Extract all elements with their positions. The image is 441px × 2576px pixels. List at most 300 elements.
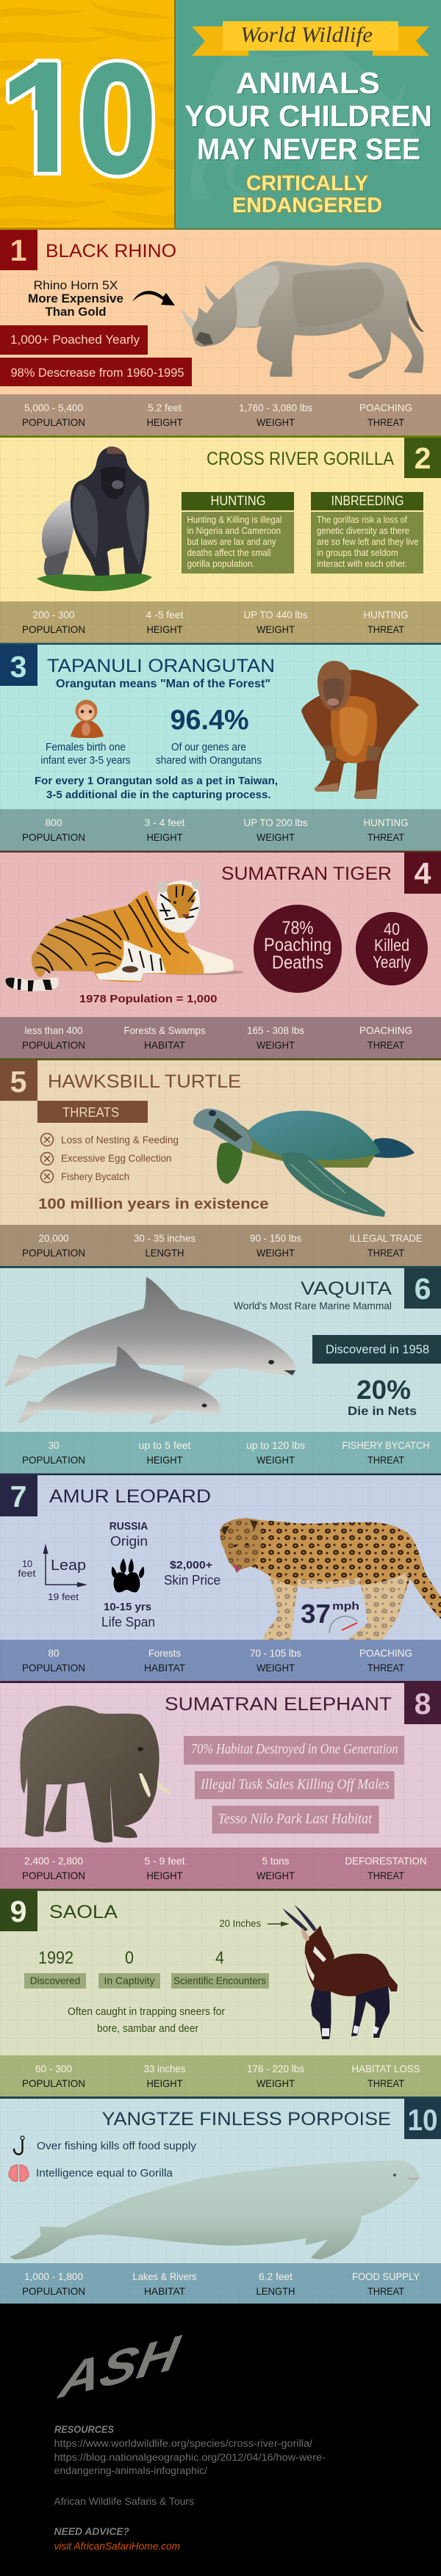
icon: fish hook xyxy=(14,2136,24,2154)
stat: threat: THREAT xyxy=(368,623,404,635)
life span: Life Span xyxy=(101,1615,155,1629)
stat: threat: THREAT xyxy=(368,1039,404,1051)
text: genes: Of our genes are xyxy=(171,741,246,753)
resources: endangering-animals-infographic/ xyxy=(54,2465,207,2476)
text: birth rate: infant ever 3-5 years xyxy=(41,754,131,767)
stat: height xyxy=(144,2063,185,2089)
big number 10: 0 xyxy=(79,31,157,206)
stat: height xyxy=(138,1439,191,1466)
title: CROSS RIVER GORILLA xyxy=(207,449,394,469)
stat: height: HEIGHT xyxy=(147,1454,183,1466)
stat: population: POPULATION xyxy=(22,1662,85,1674)
panel: hunting: Hunting & Killing is illegal xyxy=(187,515,282,525)
stat: habitat: HABITAT xyxy=(144,2285,185,2297)
stat: length: LENGTH xyxy=(256,2285,295,2297)
number badge 8: 8 xyxy=(415,1687,431,1721)
stat: height xyxy=(146,609,184,635)
number badge 1 xyxy=(0,230,37,270)
stat: threat xyxy=(352,2271,420,2297)
stat: threat: THREAT xyxy=(368,2077,404,2089)
stat: threat: POACHING xyxy=(359,1024,412,1036)
number badge 3: 3 xyxy=(10,650,26,684)
number badge 4 xyxy=(404,853,441,894)
stat: weight: UP TO 200 lbs xyxy=(244,817,307,828)
stat: weight: 1,760 - 3,080 lbs xyxy=(239,402,312,413)
callout circle: killed yearly: 40 xyxy=(384,919,400,938)
vaquita illustration: adult xyxy=(5,1277,295,1388)
need advice xyxy=(54,2525,180,2552)
fact panel: tusk sales xyxy=(195,1771,394,1799)
stat: weight: UP TO 440 lbs xyxy=(244,609,307,621)
big number 10: 1 xyxy=(0,32,87,206)
stat: height: 5.2 feet xyxy=(148,402,182,413)
title: HAWKSBILL TURTLE xyxy=(48,1071,241,1092)
callout circle: killed yearly: Killed xyxy=(374,936,409,955)
callout circle: killed yearly: Yearly xyxy=(373,952,411,972)
stat: weight: WEIGHT xyxy=(257,1662,295,1674)
threat item: bycatch xyxy=(41,1171,129,1182)
stat banner: decrease xyxy=(0,358,192,386)
horn annotation: 20 Inches xyxy=(219,1917,261,1929)
stat: length: 6.2 feet xyxy=(259,2271,293,2282)
fact: in captivity: In Captivity xyxy=(104,1975,154,1986)
text: birth rate: Females birth one xyxy=(46,741,126,753)
number badge 7 xyxy=(0,1475,37,1516)
stat: height: up to 5 feet xyxy=(138,1439,191,1451)
stat: length: LENGTH xyxy=(146,1247,184,1259)
headline: MAY NEVER SEE xyxy=(197,132,420,166)
stat: population: POPULATION xyxy=(22,2285,85,2297)
section 9: saola xyxy=(0,1891,441,2099)
fact panel: tesso nilo: Tesso Nilo Park Last Habitat xyxy=(218,1811,372,1827)
header teal panel xyxy=(176,0,441,228)
section 10: yangtze finless porpoise xyxy=(0,2099,441,2304)
title: SAOLA xyxy=(49,1902,118,1922)
stat: threat: DEFORESTATION xyxy=(345,1855,426,1867)
section 3: tapanuli orangutan xyxy=(0,645,441,853)
callout: rhino horn: Rhino Horn 5X xyxy=(34,278,118,292)
callout: rhino horn xyxy=(28,278,123,319)
fact: in captivity xyxy=(98,1948,160,1989)
callout: discovered xyxy=(312,1335,441,1364)
callout circle: killed yearly xyxy=(356,912,428,985)
fact panel: tesso nilo xyxy=(212,1806,379,1834)
fact: scientific encounters: Scientific Encounters xyxy=(173,1975,266,1986)
stat: threat: THREAT xyxy=(368,1247,404,1259)
note: trapping: Often caught in trapping sneers for xyxy=(68,2006,225,2018)
stat: threat xyxy=(350,1232,422,1259)
stat: threat xyxy=(359,402,412,428)
stat: population: 30 xyxy=(49,1439,60,1451)
callout: rhino horn: Than Gold xyxy=(46,305,106,319)
stat: population: 80 xyxy=(49,1647,60,1659)
subtitle: World's Most Rare Marine Mammal xyxy=(234,1300,392,1311)
stat: 96.4%: 96.4% xyxy=(171,705,248,736)
rhino illustration xyxy=(181,261,424,379)
section 8: sumatran elephant xyxy=(0,1683,441,1891)
stat: height: HEIGHT xyxy=(147,623,183,635)
text: genes: shared with Orangutans xyxy=(156,754,262,767)
panel: hunting: in Nigeria and Cameroon xyxy=(187,526,281,536)
subhead: critically endangered: CRITICALLY xyxy=(246,172,368,195)
title: AMUR LEOPARD xyxy=(49,1486,211,1507)
header yellow panel xyxy=(0,0,175,228)
stat: 20% die in nets: Die in Nets xyxy=(348,1404,417,1418)
stat: threat: HUNTING xyxy=(363,817,409,828)
section 2: cross river gorilla xyxy=(0,438,441,645)
stat: habitat xyxy=(144,1647,185,1674)
text: birth rate xyxy=(41,741,131,767)
threat item: nesting: Loss of Nesting & Feeding xyxy=(61,1134,179,1146)
header xyxy=(0,0,441,230)
callout circle: poaching deaths: Poaching xyxy=(264,935,331,955)
headline: ANIMALS xyxy=(236,66,380,100)
fact: scientific encounters xyxy=(171,1948,269,1989)
title: YANGTZE FINLESS PORPOISE xyxy=(101,2109,391,2130)
life span: 10-15 yrs xyxy=(104,1601,151,1613)
title: VAQUITA xyxy=(301,1278,392,1299)
panel: inbreeding: INBREEDING xyxy=(331,493,404,508)
stat: habitat: Forests & Swamps xyxy=(123,1024,206,1036)
stat: population: POPULATION xyxy=(22,2077,85,2089)
stat: weight xyxy=(250,1232,301,1259)
stat: threat: HABITAT LOSS xyxy=(351,2063,420,2074)
section 7: amur leopard xyxy=(0,1475,441,1683)
stat: height: 5 - 9 feet xyxy=(144,1855,185,1867)
origin: RUSSIA xyxy=(110,1520,148,1533)
stat: weight: WEIGHT xyxy=(257,1870,295,1881)
stat: threat xyxy=(351,2063,420,2089)
stat: population xyxy=(22,1855,85,1881)
fact panel: habitat destroyed: 70% Habitat Destroyed in One Generation xyxy=(191,1741,398,1757)
stat: threat: THREAT xyxy=(368,831,404,843)
stat: weight: up to 120 lbs xyxy=(246,1439,305,1451)
stat: height: HEIGHT xyxy=(147,2077,183,2089)
number badge 9 xyxy=(0,1891,37,1931)
stat bar xyxy=(22,1855,426,1881)
stat: height: HEIGHT xyxy=(147,831,183,843)
stat: length: 30 - 35 inches xyxy=(134,1232,196,1244)
stat: threat: THREAT xyxy=(368,1454,404,1466)
subtitle: Orangutan means "Man of the Forest" xyxy=(56,678,270,690)
resources: https://www.worldwildlife.org/species/cross-river-gorilla/ xyxy=(54,2438,312,2449)
stat: population: POPULATION xyxy=(22,416,85,428)
leap diagram xyxy=(18,1544,87,1602)
need advice: visit AfricanSafariHome.com xyxy=(54,2540,180,2552)
icon: baby orangutan xyxy=(71,700,104,738)
big number 10: 0 xyxy=(79,31,157,206)
logo: ASH: ASH xyxy=(54,2324,185,2409)
stat: population xyxy=(22,402,85,428)
number badge 6: 6 xyxy=(415,1272,431,1306)
stat: habitat xyxy=(123,1024,206,1051)
ribbon: World Wildlife xyxy=(192,21,429,56)
stat: weight xyxy=(247,1024,304,1051)
stat: weight: 176 - 220 lbs xyxy=(247,2063,304,2074)
stat: weight: 165 - 308 lbs xyxy=(247,1024,304,1036)
stat: weight: WEIGHT xyxy=(257,831,295,843)
stat: weight: WEIGHT xyxy=(257,416,295,428)
vaquita illustration: calf xyxy=(18,1346,220,1425)
stat bar xyxy=(22,1439,429,1466)
callout: rhino horn: More Expensive xyxy=(28,292,123,305)
fact: intelligence: Intelligence equal to Gorilla xyxy=(36,2167,173,2179)
stat: 20% die in nets: 20% xyxy=(356,1375,411,1405)
stat: weight: WEIGHT xyxy=(257,623,295,635)
porpoise illustration xyxy=(10,2160,420,2260)
stat: population: POPULATION xyxy=(22,1247,85,1259)
stat: height: HEIGHT xyxy=(147,1870,183,1881)
note: trapping: bore, sambar and deer xyxy=(97,2023,198,2035)
stat: population: 800 xyxy=(46,817,62,828)
stat: weight xyxy=(244,817,307,843)
stat bar xyxy=(22,1647,412,1674)
title: SUMATRAN ELEPHANT xyxy=(165,1694,392,1715)
stat: height: HEIGHT xyxy=(147,416,183,428)
section 6: vaquita xyxy=(0,1268,441,1475)
panel: inbreeding: genetic diversity as there xyxy=(317,526,409,536)
headline: YOUR CHILDREN xyxy=(184,99,432,133)
stat bar xyxy=(22,1232,422,1259)
fact: in captivity: 0 xyxy=(125,1948,134,1968)
panel: inbreeding: The gorillas risk a loss of xyxy=(317,515,407,525)
stat: height: 3 - 4 feet xyxy=(144,817,185,828)
number badge 6 xyxy=(404,1268,441,1309)
fact panel: tusk sales: Illegal Tusk Sales Killing Off Males xyxy=(200,1776,390,1792)
panel: hunting: HUNTING xyxy=(210,493,266,508)
title: BLACK RHINO xyxy=(46,241,176,261)
stat: population: POPULATION xyxy=(22,1870,85,1881)
ghost rhino watermark xyxy=(191,51,429,208)
stat: height xyxy=(147,402,183,428)
stat: threat xyxy=(345,1855,426,1881)
stat bar xyxy=(22,402,412,428)
stat: population: 60 - 300 xyxy=(35,2063,72,2074)
number badge 4: 4 xyxy=(415,856,431,890)
stat: population: POPULATION xyxy=(22,1039,85,1051)
stat: threat: THREAT xyxy=(368,2285,404,2297)
stat: weight xyxy=(246,1439,305,1466)
stat: weight: WEIGHT xyxy=(257,2077,295,2089)
stat: threat: FISHERY BYCATCH xyxy=(343,1439,429,1451)
number badge 7: 7 xyxy=(10,1480,26,1513)
life span xyxy=(101,1601,155,1629)
title: TAPANULI ORANGUTAN xyxy=(47,656,275,676)
stat bar xyxy=(22,2063,420,2089)
stat: habitat xyxy=(132,2271,197,2297)
number badge 1: 1 xyxy=(10,234,26,267)
number badge 9: 9 xyxy=(10,1895,26,1928)
turtle illustration xyxy=(193,1109,415,1217)
stat: population xyxy=(22,1647,85,1674)
stat: population: 1,000 - 1,800 xyxy=(24,2271,83,2282)
stat: height: 33 inches xyxy=(144,2063,185,2074)
stat: height xyxy=(144,1855,185,1881)
leap diagram: 19 feet xyxy=(48,1591,79,1602)
elephant illustration xyxy=(20,1706,172,1842)
icon: paw xyxy=(112,1558,144,1592)
number badge 8 xyxy=(404,1683,441,1724)
stat: threat xyxy=(363,817,409,843)
stat banner: poached xyxy=(0,325,148,355)
number badge 5 xyxy=(0,1060,37,1101)
threat item: eggs: Excessive Egg Collection xyxy=(61,1152,172,1164)
panel: inbreeding: are so few left and they live xyxy=(317,537,419,547)
callout: discovered: Discovered in 1958 xyxy=(326,1342,429,1356)
stat: threat: ILLEGAL TRADE xyxy=(350,1232,422,1244)
orangutan illustration xyxy=(301,661,419,799)
stat bar xyxy=(22,2271,420,2297)
stat: threat: POACHING xyxy=(359,402,412,413)
stat: weight: WEIGHT xyxy=(257,1039,295,1051)
stat: population: 2,400 - 2,800 xyxy=(24,1855,83,1867)
stat: population: POPULATION xyxy=(22,1454,85,1466)
stat: habitat: Forests xyxy=(148,1647,181,1659)
stat: weight: 70 - 105 lbs xyxy=(250,1647,301,1659)
number badge 5: 5 xyxy=(10,1065,26,1099)
number badge 2: 2 xyxy=(415,441,431,475)
leap diagram: feet xyxy=(18,1568,36,1579)
stat: weight: 90 - 150 lbs xyxy=(250,1232,301,1244)
stat bar xyxy=(22,1024,412,1051)
stat: weight: WEIGHT xyxy=(257,1454,295,1466)
fact panel: habitat destroyed xyxy=(184,1736,404,1765)
leopard illustration xyxy=(220,1519,441,1640)
callout circle: poaching deaths: 78% xyxy=(282,918,313,938)
credit: African Wildlife Safaris & Tours xyxy=(54,2495,194,2507)
speed callout: 37 mph: mph xyxy=(332,1600,359,1613)
stat: population xyxy=(22,1232,85,1259)
note: 1978 population: 1978 Population = 1,000 xyxy=(79,993,217,1005)
stat: population xyxy=(22,609,85,635)
text: genes xyxy=(156,741,262,767)
horn annotation xyxy=(219,1917,290,1929)
panel: hunting: gorilla population. xyxy=(187,559,254,569)
stat: population: POPULATION xyxy=(22,831,85,843)
stat: habitat: HABITAT xyxy=(144,1039,185,1051)
panel: inbreeding xyxy=(311,492,423,574)
stat: weight xyxy=(257,1855,295,1881)
fact: scientific encounters: 4 xyxy=(215,1948,224,1968)
stat: weight xyxy=(244,609,307,635)
stat: weight: 5 tons xyxy=(262,1855,290,1867)
headline xyxy=(184,66,432,166)
stat: weight: WEIGHT xyxy=(257,1247,295,1259)
stat: population: 200 - 300 xyxy=(32,609,75,621)
leap diagram: 10 xyxy=(22,1558,32,1569)
stat: weight xyxy=(247,2063,304,2089)
panel: inbreeding: interact with each other. xyxy=(317,559,407,569)
stat: population: 5,000 - 5,400 xyxy=(24,402,83,413)
stat: habitat: HABITAT xyxy=(144,1662,185,1674)
callout circle: poaching deaths xyxy=(254,905,342,993)
stat: population xyxy=(22,1439,85,1466)
threats heading xyxy=(37,1101,148,1123)
fact: over fishing: Over fishing kills off food supply xyxy=(37,2140,197,2152)
threats heading: THREATS xyxy=(62,1105,119,1120)
subhead: critically endangered xyxy=(232,172,382,217)
number badge 3 xyxy=(0,645,37,686)
stat bar xyxy=(22,817,409,843)
origin xyxy=(110,1520,148,1549)
stat: 20% die in nets xyxy=(348,1375,417,1418)
number badge 10: 10 xyxy=(407,2103,438,2137)
stat banner: poached: 1,000+ Poached Yearly xyxy=(10,333,140,347)
arrow xyxy=(132,291,175,305)
threat item: bycatch: Fishery Bycatch xyxy=(61,1171,129,1182)
skin price: Skin Price xyxy=(164,1573,220,1588)
gorilla illustration xyxy=(37,446,152,591)
big number 10: 1 xyxy=(0,32,87,206)
panel: inbreeding: in groups that seldom xyxy=(317,548,398,558)
note: trapping xyxy=(68,2006,225,2035)
stat: population xyxy=(22,2063,85,2089)
icon: brain xyxy=(9,2165,29,2182)
section 5: hawksbill turtle xyxy=(0,1060,441,1268)
stat: threat: FOOD SUPPLY xyxy=(352,2271,420,2282)
stat: height: 4 -5 feet xyxy=(146,609,184,621)
number badge 2 xyxy=(404,438,441,478)
saola illustration xyxy=(282,1905,398,2039)
fact: 100 million years: 100 million years in existence xyxy=(38,1196,269,1212)
resources xyxy=(54,2423,326,2476)
resources: RESOURCES xyxy=(54,2423,115,2435)
tiger illustration xyxy=(5,879,244,991)
stat: length xyxy=(256,2271,295,2297)
panel: hunting: deaths affect the small xyxy=(187,548,270,558)
stat: length xyxy=(134,1232,196,1259)
stat: height xyxy=(144,817,185,843)
stat: threat: THREAT xyxy=(368,416,404,428)
stat banner: decrease: 98% Descrease from 1960-1995 xyxy=(10,366,184,380)
stat: threat xyxy=(343,1439,429,1466)
stat: threat xyxy=(359,1647,412,1674)
leap diagram: Leap xyxy=(51,1557,86,1574)
stat: weight xyxy=(250,1647,301,1674)
resources: https://blog.nationalgeographic.org/2012/04/16/how-were- xyxy=(54,2452,326,2463)
stat: population xyxy=(22,1024,85,1051)
title: SUMATRAN TIGER xyxy=(221,864,392,884)
skin price: $2,000+ xyxy=(170,1559,212,1571)
speed callout: 37 mph: 37 xyxy=(301,1599,331,1629)
stat: threat: HUNTING xyxy=(363,609,409,621)
stat: threat: POACHING xyxy=(359,1647,412,1659)
fact: discovered: 1992 xyxy=(38,1948,74,1968)
stat: population: POPULATION xyxy=(22,623,85,635)
ribbon: World Wildlife: World Wildlife xyxy=(240,23,373,47)
stat: habitat: Lakes & Rivers xyxy=(132,2271,197,2282)
stat: threat xyxy=(359,1024,412,1051)
text: pet trade note: 3-5 additional die in the capturing process. xyxy=(46,789,270,801)
stat: threat xyxy=(363,609,409,635)
stat: threat: THREAT xyxy=(368,1870,404,1881)
need advice: NEED ADVICE? xyxy=(54,2525,129,2537)
stat: weight xyxy=(239,402,312,428)
stat bar xyxy=(22,609,409,635)
origin: Origin xyxy=(110,1534,148,1549)
text: pet trade note: For every 1 Orangutan sold as a pet in Taiwan, xyxy=(35,775,278,787)
fact: discovered: Discovered xyxy=(30,1975,80,1986)
footer xyxy=(0,2304,441,2576)
panel: hunting xyxy=(182,492,294,574)
stat: threat: THREAT xyxy=(368,1662,404,1674)
fact: discovered xyxy=(24,1948,86,1989)
big number 10 xyxy=(6,59,156,179)
text: pet trade note xyxy=(35,775,278,801)
stat: population: 20,000 xyxy=(38,1232,69,1244)
section 1: black rhino xyxy=(0,230,441,438)
speed callout: 37 mph xyxy=(301,1599,359,1633)
